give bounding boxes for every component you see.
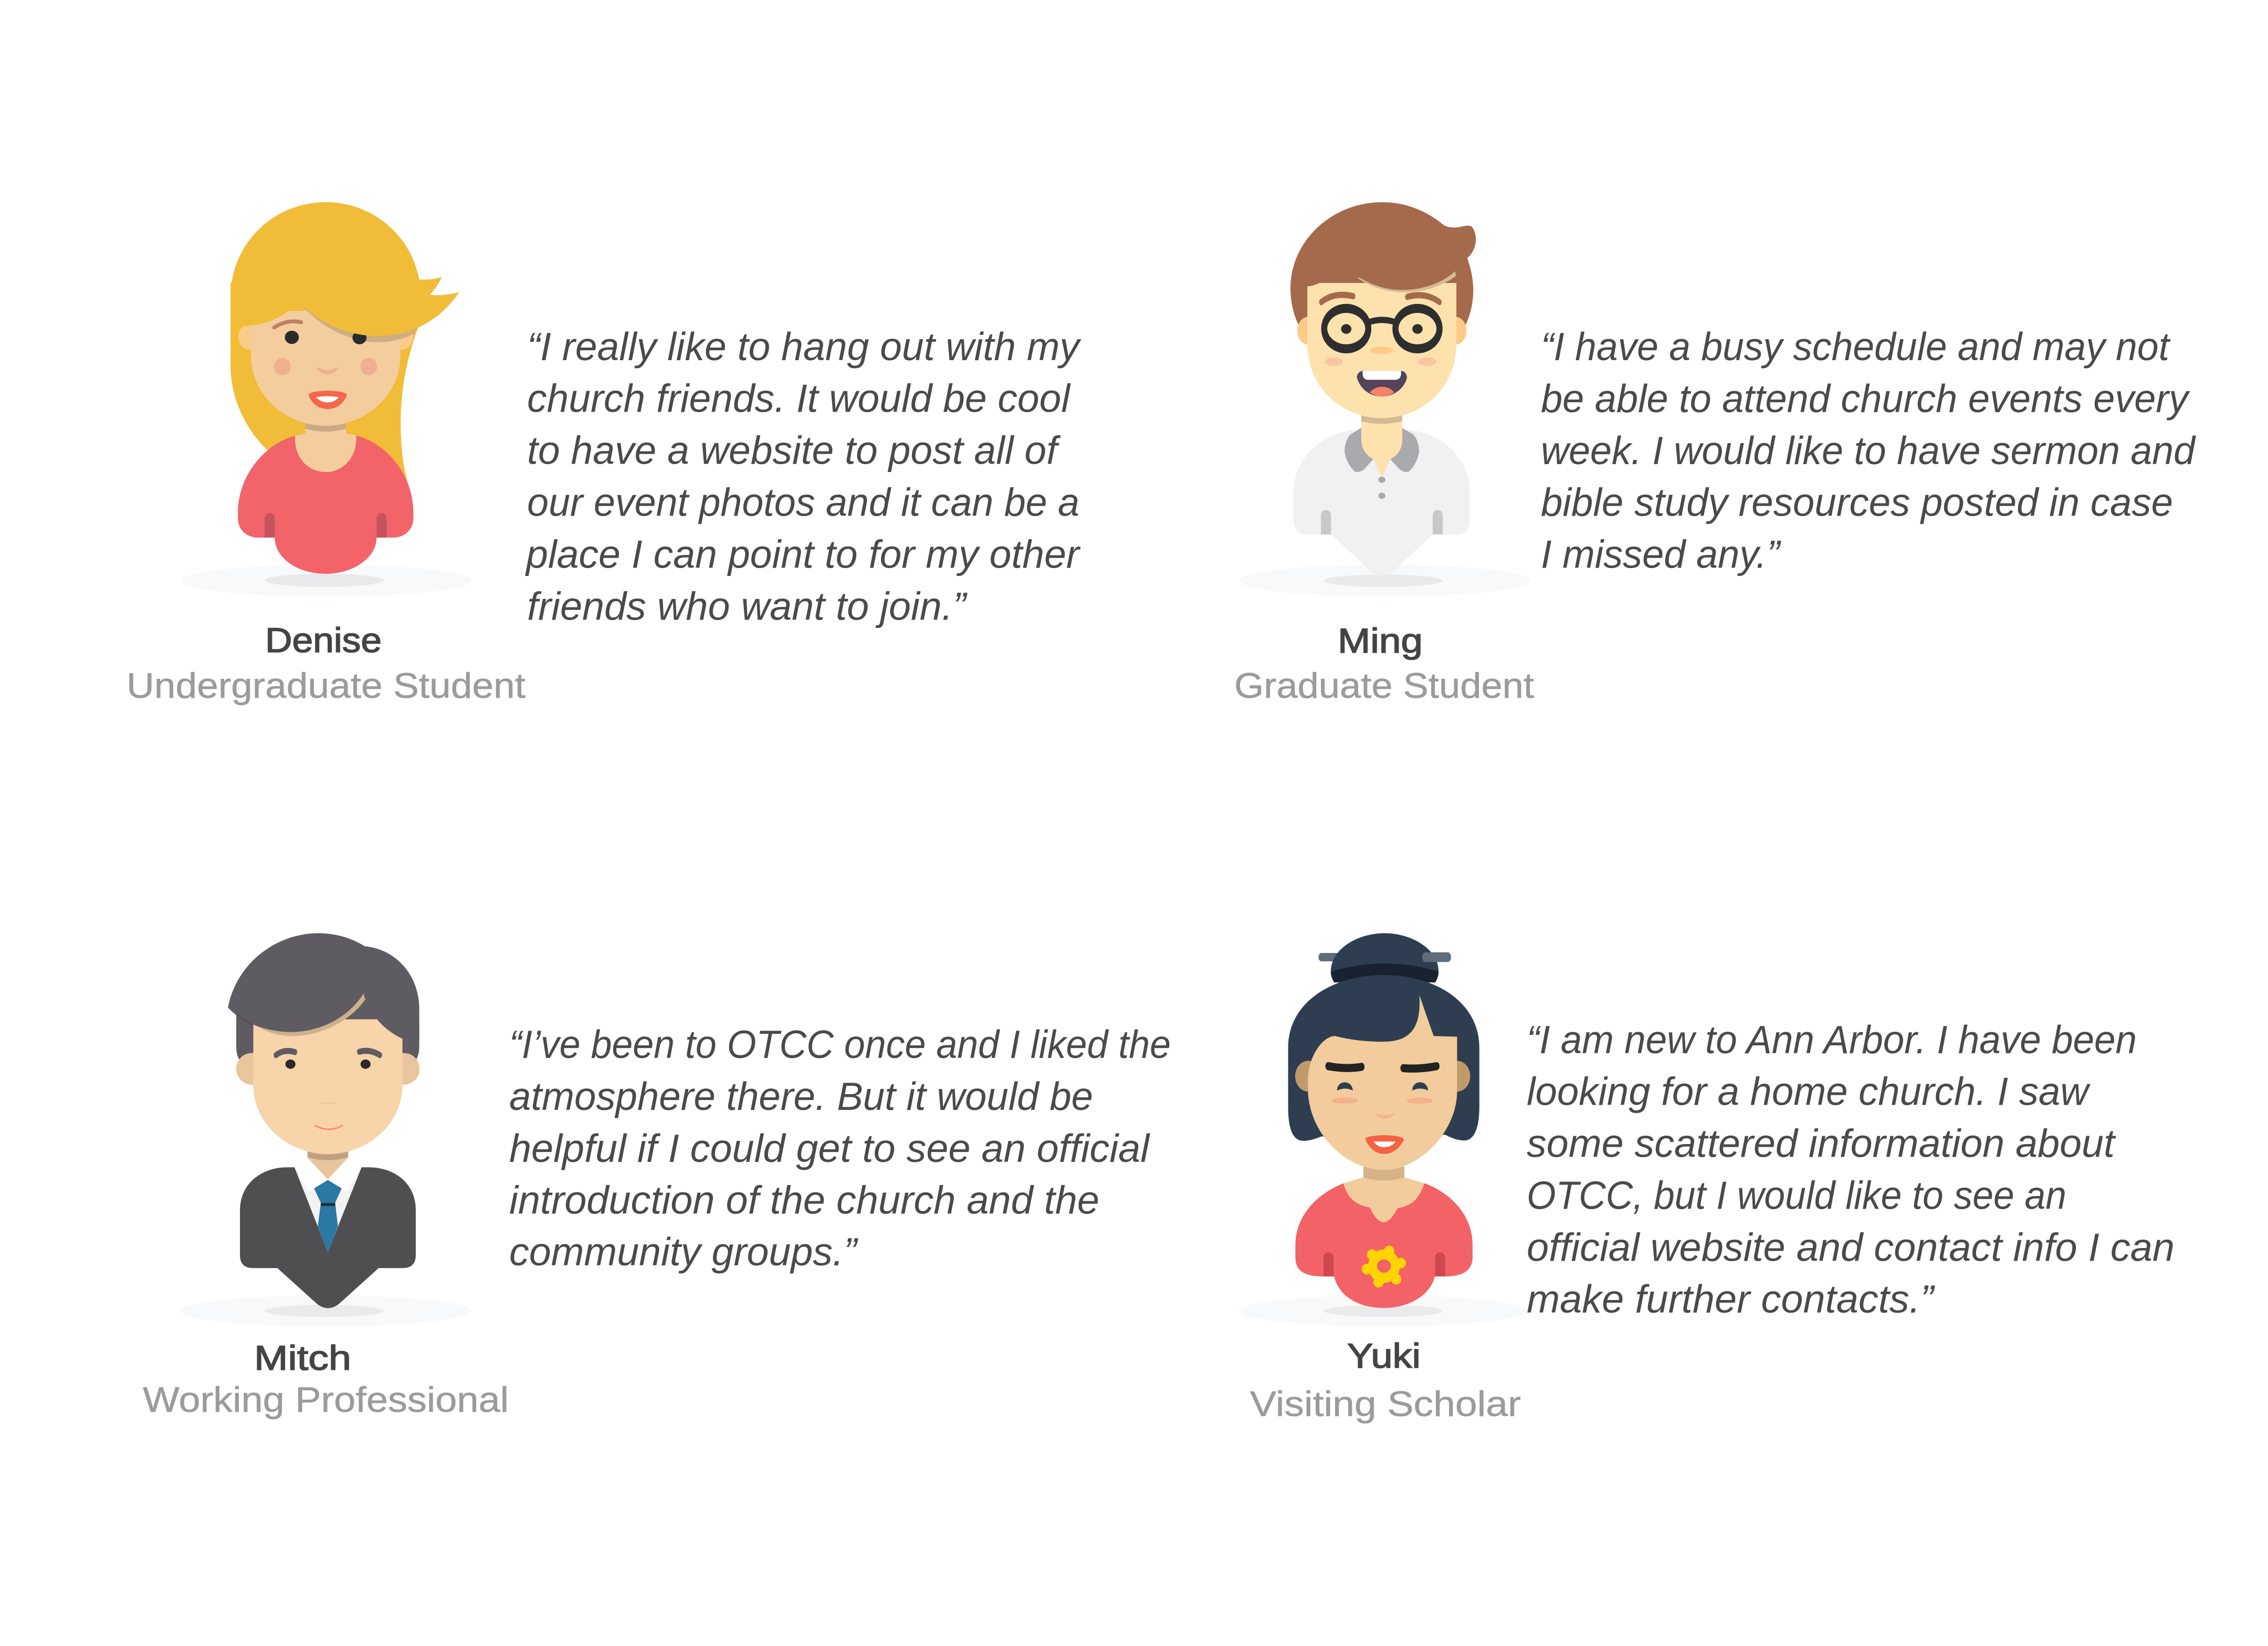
- panel: Yuki persona: [1239, 933, 2175, 1424]
- quote: Yuki: official website and contact info I can: [1527, 1225, 2175, 1270]
- quote: Mitch: introduction of the church and the: [509, 1178, 1099, 1222]
- quote: Denise: place I can point to for my other: [525, 532, 1081, 576]
- quote: Yuki: “I am new to Ann Arbor. I have been: [1527, 1018, 2137, 1062]
- quote: Mitch: atmosphere there. But it would be: [509, 1074, 1093, 1118]
- quote: Mitch: helpful if I could get to see an official: [509, 1126, 1150, 1170]
- quote: Yuki: OTCC, but I would like to see an: [1527, 1173, 2066, 1217]
- avatar: Mitch: [180, 933, 471, 1326]
- quote: Denise: “I really like to hang out with my: [527, 324, 1082, 369]
- panel: Mitch persona: [143, 933, 1171, 1420]
- panel: Ming persona: [1234, 202, 2196, 706]
- quote: Ming: “I have a busy schedule and may not: [1541, 324, 2171, 369]
- quote: Yuki: make further contacts.”: [1527, 1277, 1935, 1321]
- quote: Yuki: [1527, 1018, 2175, 1321]
- quote: Mitch: [509, 1022, 1171, 1274]
- quote: Denise: friends who want to join.”: [527, 584, 968, 628]
- quote: Ming: week. I would like to have sermon and: [1541, 428, 2196, 473]
- avatar: Denise: [181, 202, 471, 597]
- quote: Ming: I missed any.”: [1541, 532, 1781, 576]
- quote: Denise: [525, 324, 1082, 628]
- role: Graduate Student: Graduate Student: [1234, 666, 1534, 706]
- quote: Mitch: community groups.”: [509, 1230, 858, 1274]
- quote: Yuki: some scattered information about: [1527, 1121, 2116, 1166]
- name: Ming: Ming: [1338, 621, 1423, 660]
- quote: Ming: [1541, 324, 2196, 576]
- avatar: Ming: [1240, 202, 1531, 597]
- name: Yuki: Yuki: [1347, 1336, 1421, 1375]
- role: Undergraduate Student: Undergraduate Student: [127, 666, 526, 706]
- quote: Yuki: looking for a home church. I saw: [1527, 1069, 2091, 1113]
- quote: Denise: church friends. It would be cool: [527, 376, 1071, 420]
- quote: Denise: our event photos and it can be a: [527, 480, 1079, 524]
- role: Visiting Scholar: Visiting Scholar: [1250, 1384, 1521, 1424]
- quote: Ming: be able to attend church events every: [1541, 376, 2190, 421]
- quote: Mitch: “I’ve been to OTCC once and I liked the: [509, 1022, 1171, 1066]
- name: Mitch: Mitch: [254, 1338, 351, 1377]
- avatar: Yuki: [1239, 933, 1527, 1326]
- quote: Denise: to have a website to post all of: [527, 428, 1061, 473]
- role: Working Professional: Working Professional: [143, 1380, 509, 1420]
- name: Denise: Denise: [265, 621, 382, 659]
- quote: Ming: bible study resources posted in case: [1541, 480, 2173, 524]
- panel: Denise persona: [127, 202, 1082, 706]
